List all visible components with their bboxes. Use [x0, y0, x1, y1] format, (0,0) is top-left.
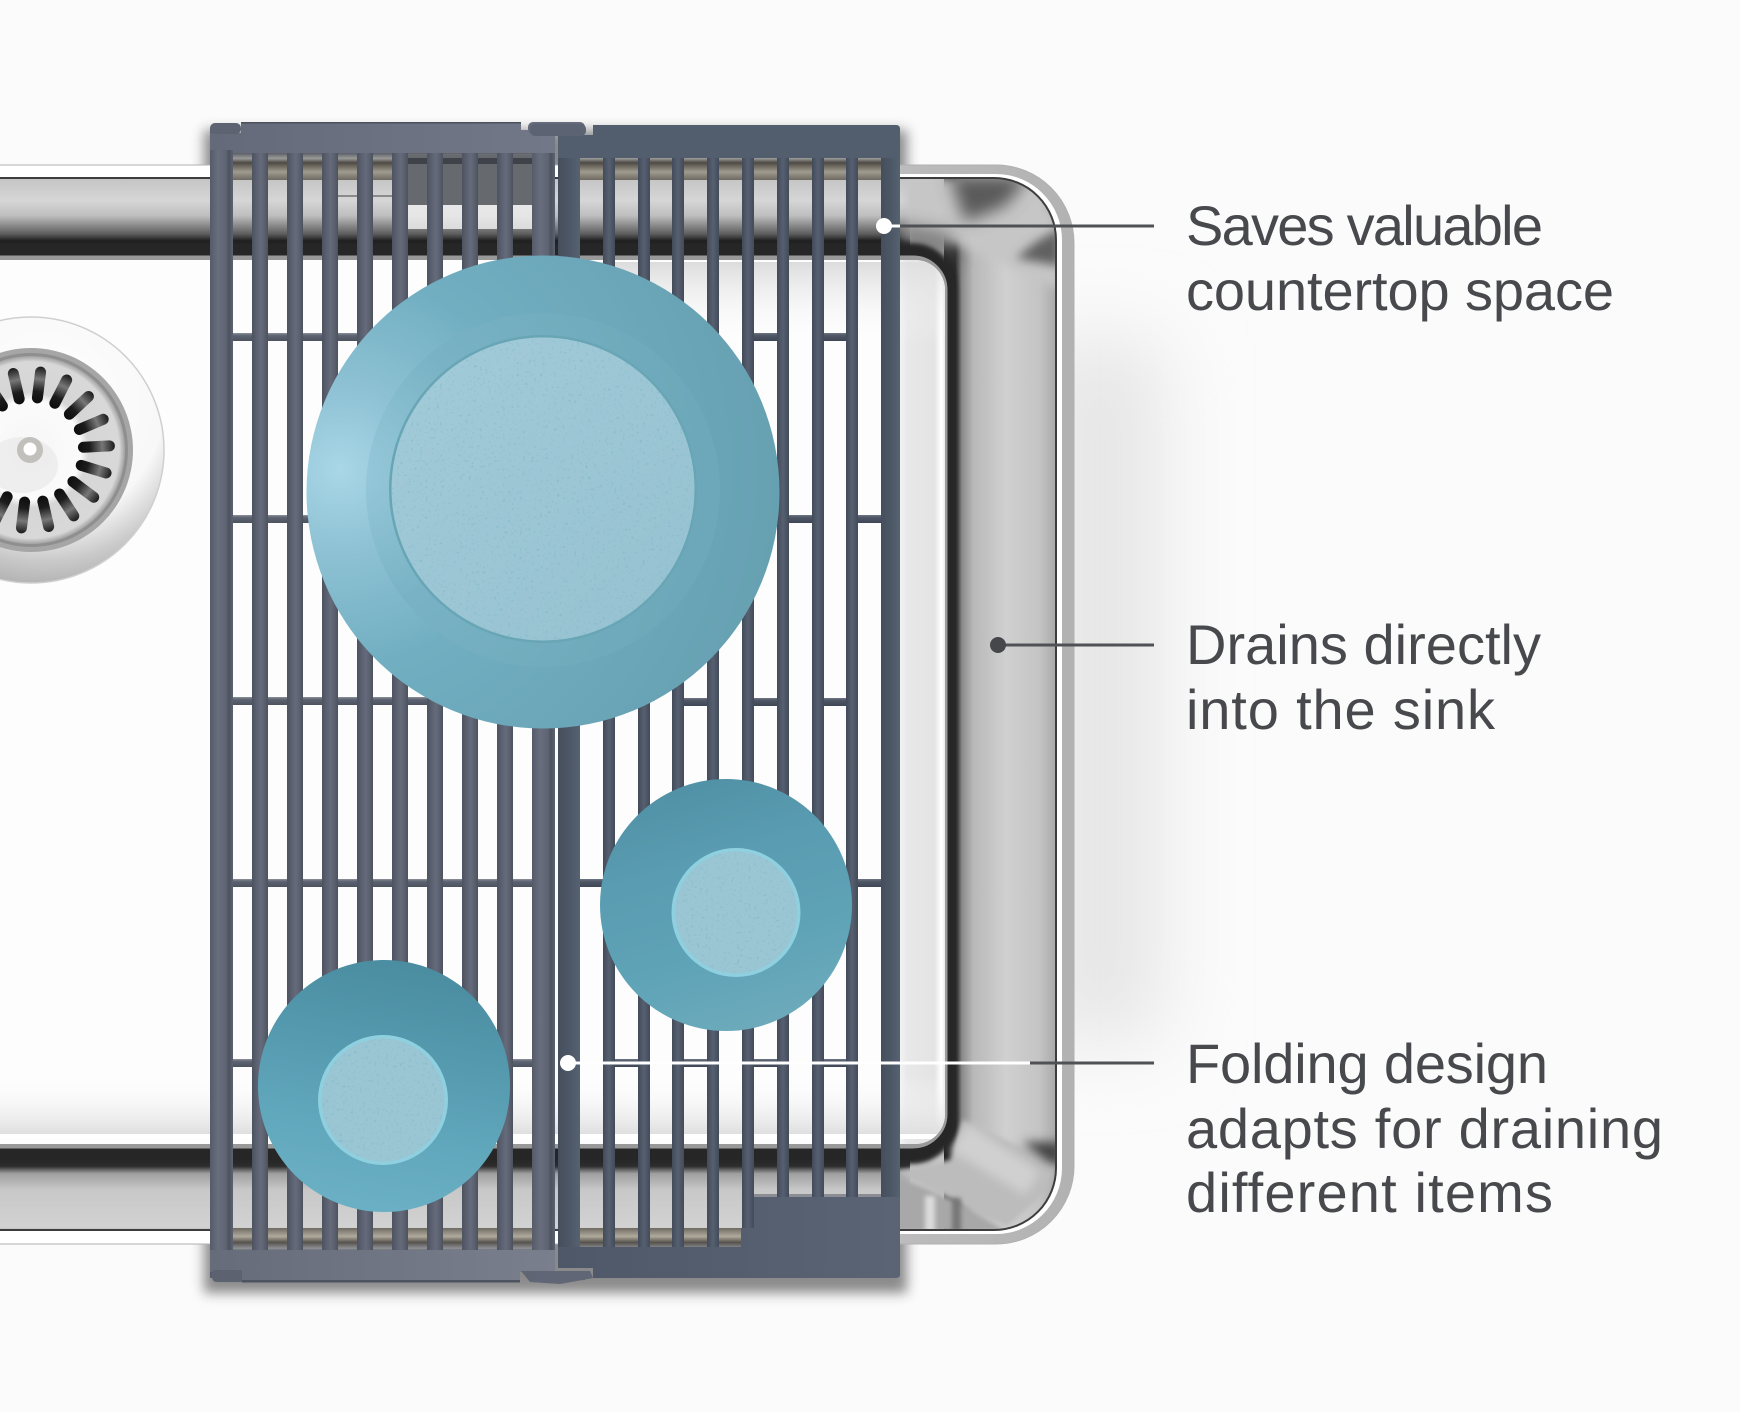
rack shadow	[204, 130, 907, 1293]
infographic canvas	[0, 121, 1660, 1302]
bowl centre	[675, 852, 797, 974]
sink rim highlight	[0, 174, 1062, 1234]
right panel bottom block	[558, 1197, 900, 1278]
bowl body	[258, 960, 510, 1212]
crossbars: left panel	[233, 333, 532, 1067]
marker dot	[876, 218, 892, 234]
left panel frame	[210, 128, 555, 1278]
small bowl right	[600, 779, 852, 1031]
left panel bottom bar	[210, 1250, 555, 1282]
callout: saves countertop space	[876, 194, 1614, 322]
callout: drains into the sink	[990, 613, 1541, 741]
plate band	[366, 313, 720, 667]
callout text: Folding design	[1186, 1032, 1548, 1095]
right panel frame	[558, 128, 900, 1276]
large plate	[306, 256, 780, 728]
callout text: Drains directly	[1186, 613, 1541, 676]
drain flange	[0, 317, 164, 583]
drain hub	[17, 437, 43, 463]
bowl centre	[322, 1038, 444, 1162]
callout text: Saves valuable	[1186, 194, 1543, 257]
corner reflection: top right	[900, 176, 1060, 290]
marker dot	[990, 637, 1006, 653]
leader line	[998, 644, 1154, 646]
left panel bottom tabs	[212, 1270, 585, 1282]
rim seen through rack: bottom	[233, 1228, 533, 1252]
sink	[0, 165, 1074, 1244]
folded section under left panel	[338, 155, 532, 229]
drain ring	[0, 348, 133, 552]
right panel block arches	[754, 1194, 881, 1197]
sink inner wall	[0, 176, 1062, 1232]
callout: folding design: adapts for draining	[1186, 1097, 1663, 1160]
plate ridge	[389, 335, 697, 643]
callout: folding design: different items	[1186, 1161, 1553, 1224]
bottom pivot tab	[530, 1271, 593, 1284]
callout: saves countertop space: countertop space	[1186, 259, 1614, 322]
marker dot	[560, 1055, 576, 1071]
callout: drains into the sink: into the sink	[1186, 678, 1496, 741]
inner wall outline	[0, 178, 1056, 1230]
crossbars: right panel	[580, 333, 882, 1067]
folding rack	[210, 122, 900, 1284]
basin dark edge	[0, 243, 957, 1164]
leader line	[884, 224, 1154, 228]
right panel pivot tab	[530, 124, 586, 136]
drain slots	[0, 366, 115, 534]
drain	[0, 317, 164, 583]
left panel top tabs	[210, 122, 585, 134]
bowl ridge	[318, 1035, 448, 1165]
plate outer rim	[306, 256, 780, 728]
right panel top bar	[558, 125, 900, 158]
plate centre	[392, 338, 694, 640]
callout: folding design	[560, 1032, 1663, 1224]
left panel top bar	[210, 122, 555, 153]
bowl body	[600, 779, 852, 1031]
rim seen through rack: top	[233, 153, 533, 180]
drain centre shading	[0, 437, 58, 493]
basin floor	[0, 258, 950, 1148]
leader line	[568, 1062, 1030, 1064]
corner reflection: bottom right	[895, 1120, 1062, 1232]
soft shadow right of sink	[1040, 340, 1160, 1040]
drain strainer	[0, 356, 125, 544]
small bowl left	[258, 960, 510, 1212]
bowl ridge	[672, 848, 800, 977]
left panel bars	[252, 150, 513, 1252]
right panel bars	[603, 155, 858, 1250]
sink rim	[0, 165, 1074, 1244]
